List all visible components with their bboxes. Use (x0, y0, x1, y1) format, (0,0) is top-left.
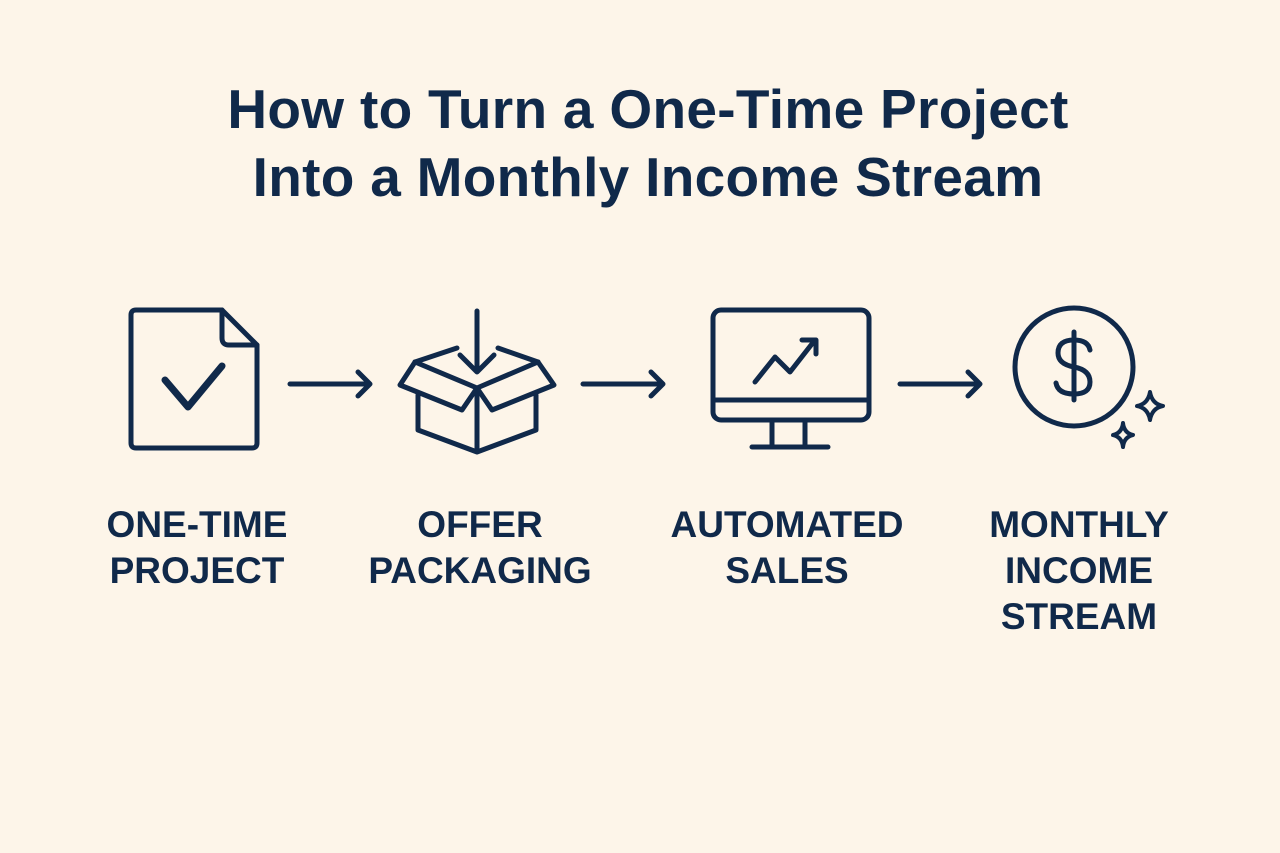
icon: box (400, 311, 554, 452)
label: monthly income stream: STREAM (1001, 596, 1157, 637)
label: monthly income stream (989, 504, 1169, 637)
arrow 1 (290, 372, 370, 396)
title: How to Turn a One-Time Project (227, 78, 1069, 140)
icon: dollar coin with sparkles (1015, 308, 1163, 447)
label: automated sales: SALES (725, 550, 849, 591)
label: offer packaging: OFFER (417, 504, 543, 545)
icon: document with check (131, 310, 257, 448)
label: automated sales (671, 504, 903, 591)
label: automated sales: AUTOMATED (671, 504, 903, 545)
label: offer packaging (368, 504, 592, 591)
arrow 3 (900, 372, 980, 396)
title: Into a Monthly Income Stream (253, 146, 1043, 208)
label: monthly income stream: INCOME (1005, 550, 1153, 591)
label: one-time project: ONE-TIME (107, 504, 287, 545)
title (227, 78, 1069, 208)
icon: monitor with chart (713, 310, 869, 447)
label: one-time project (107, 504, 287, 591)
label: monthly income stream: MONTHLY (989, 504, 1169, 545)
label: one-time project: PROJECT (110, 550, 284, 591)
arrow 2 (583, 372, 663, 396)
label: offer packaging: PACKAGING (368, 550, 592, 591)
